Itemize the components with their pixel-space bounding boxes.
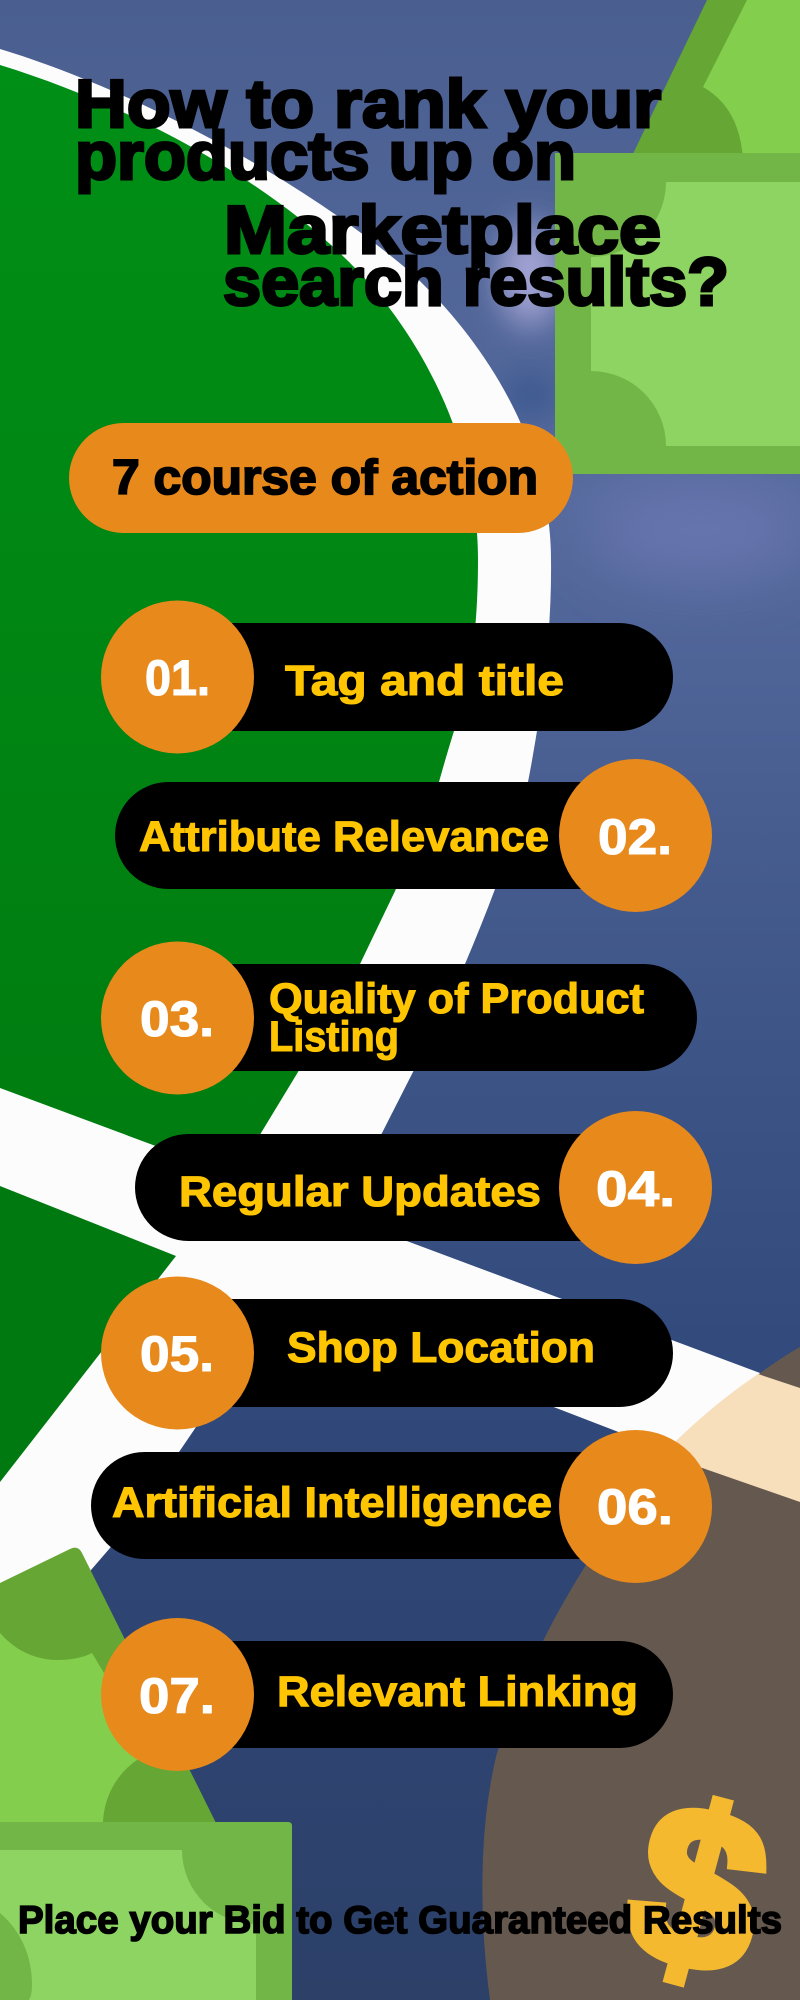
step 02: 02. [598, 809, 672, 865]
step 01 [101, 600, 673, 754]
step 04: 04. [596, 1161, 675, 1217]
title: How to rank your [75, 66, 661, 142]
step 06: Artificial Intelligence [112, 1479, 552, 1527]
step 01: Tag and title [285, 657, 564, 705]
icon: money bills bottom left [0, 1548, 292, 2000]
step 07: 07. [139, 1668, 215, 1724]
step 02: Attribute Relevance [139, 813, 549, 861]
step 05: Shop Location [287, 1324, 595, 1372]
step 05: 05. [140, 1326, 214, 1382]
step 03: Listing [269, 1013, 399, 1061]
step 04: Regular Updates [179, 1168, 541, 1216]
title: search results? [223, 244, 729, 320]
step 07 [101, 1618, 673, 1771]
step 05 [101, 1276, 673, 1430]
subtitle pill: 7 course of action [69, 423, 573, 533]
step 04 [135, 1111, 712, 1264]
title [75, 66, 729, 320]
subtitle pill: 7 course of action: 7 course of action [112, 451, 538, 505]
step 06: 06. [597, 1479, 673, 1535]
step 03 [101, 942, 697, 1094]
title: Marketplace [224, 192, 661, 268]
step 01: 01. [145, 650, 210, 706]
step 02 [115, 759, 712, 912]
step 06 [91, 1430, 712, 1583]
step 03: 03. [140, 991, 214, 1047]
title: products up on [75, 118, 576, 194]
icon: money bills top right [555, 0, 800, 474]
step 03: Quality of Product [269, 975, 644, 1023]
call to action: Place your Bid to Get Guaranteed Results [18, 1899, 782, 1942]
step 07: Relevant Linking [277, 1668, 638, 1716]
